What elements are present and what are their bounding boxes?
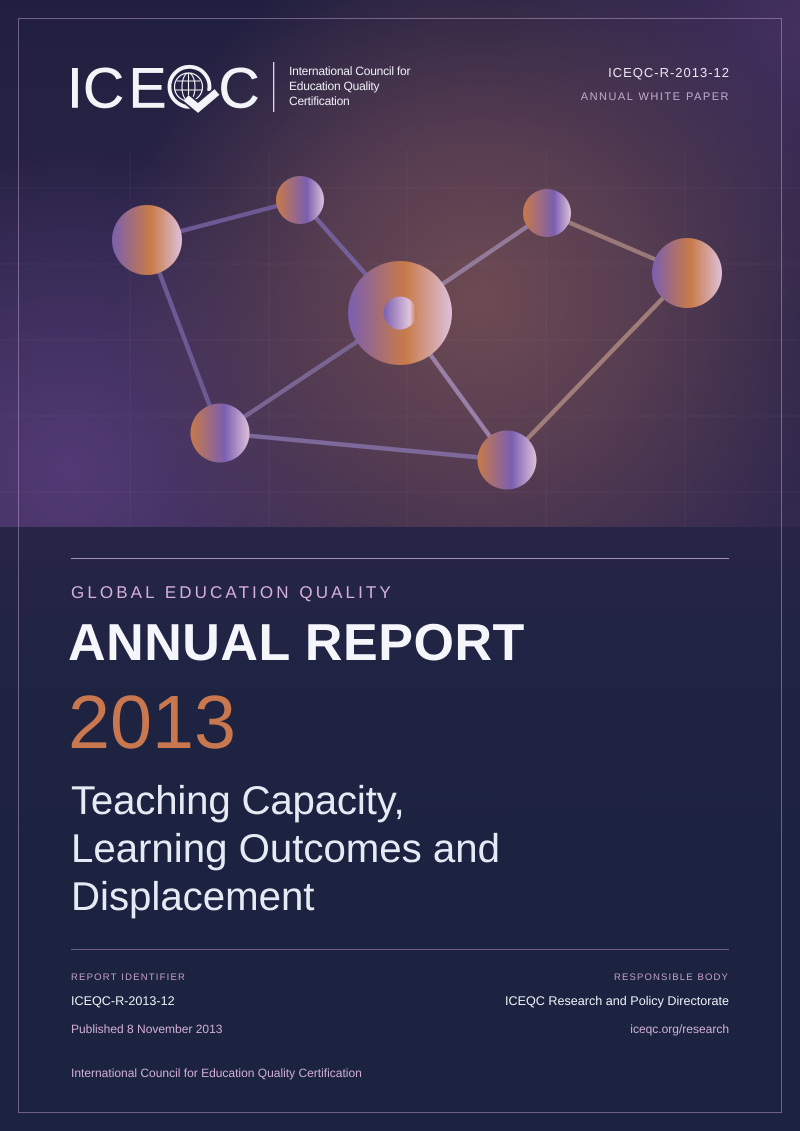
document type: ANNUAL WHITE PAPER	[581, 91, 730, 103]
network connections	[147, 200, 687, 460]
subtitle: Teaching Capacity, Learning Outcomes and Displacement	[71, 778, 500, 919]
logo wordmark text: International Council for Education Quality Certification	[289, 64, 410, 108]
kicker: GLOBAL EDUCATION QUALITY	[71, 583, 394, 602]
responsible value: ICEQC Research and Policy Directorate	[505, 994, 729, 1008]
year: 2013	[68, 680, 236, 764]
lower divider	[71, 949, 729, 950]
responsible label: RESPONSIBLE BODY	[614, 972, 729, 983]
publication date: Published 8 November 2013	[71, 1022, 222, 1036]
report code: ICEQC-R-2013-12	[608, 65, 730, 80]
logo	[70, 60, 410, 116]
icon: globe with check	[169, 67, 217, 108]
top divider	[71, 558, 729, 559]
network nodes	[112, 176, 722, 490]
footer organisation name: International Council for Education Quality Certification	[71, 1066, 362, 1080]
website: iceqc.org/research	[630, 1022, 729, 1036]
identifier label: REPORT IDENTIFIER	[71, 972, 186, 983]
report identifier block	[71, 972, 222, 1036]
panel: hero background with network illustration	[0, 0, 800, 527]
responsible body block	[505, 972, 729, 1036]
logo mark	[70, 60, 274, 116]
identifier value: ICEQC-R-2013-12	[71, 994, 175, 1008]
title: ANNUAL REPORT	[68, 614, 525, 672]
